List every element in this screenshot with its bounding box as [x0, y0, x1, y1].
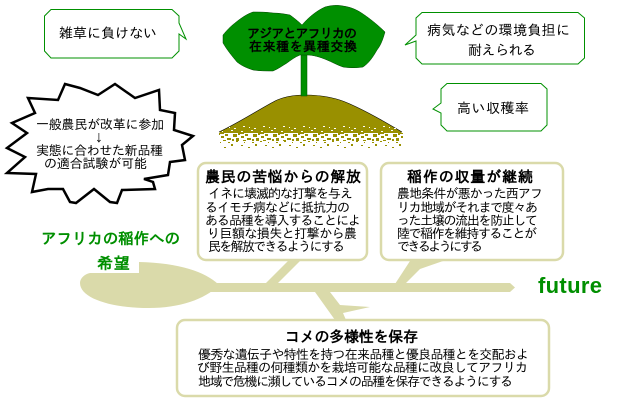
callout: high yield	[433, 84, 547, 131]
heading: hope for African rice farming: アフリカの稲作への	[41, 230, 180, 248]
label: future: future	[538, 273, 602, 298]
panel: preserving rice diversity: 優秀な遺伝子や特性を持つ在来品種と優良品種とを交配およ	[198, 347, 529, 362]
panel: sustained rice yield: できるようにする	[397, 239, 483, 254]
starburst callout: farmer participation: 一般農民が改革に参加	[36, 117, 164, 132]
starburst callout: farmer participation: の適合試験が可能	[44, 156, 147, 171]
panel: sustained rice yield: リカ地域がそれまで度々あ	[397, 200, 538, 215]
panel: preserving rice diversity: 地域で危機に瀕しているコメの品種を保存できるようにする	[198, 374, 513, 389]
panel: preserving rice diversity: コメの多様性を保存	[285, 328, 418, 346]
panel: liberation from farmers' troubles: 農民の苦悩からの解放	[205, 168, 361, 186]
starburst callout: farmer participation: 実態に合わせた新品種	[36, 143, 163, 158]
mound	[219, 95, 403, 148]
callout: disease and stress tolerance: 耐えられる	[468, 42, 536, 58]
leaves	[223, 5, 385, 71]
panel: liberation from farmers' troubles: るイモチ病などに抵抗力の	[205, 200, 350, 215]
heading: hope for African rice farming	[41, 230, 180, 273]
callout: high yield: 高い収穫率	[457, 100, 529, 116]
upper left branch	[265, 261, 300, 284]
spine	[210, 283, 515, 292]
callout: disease and stress tolerance: 病気などの環境負担に	[427, 22, 570, 38]
fish head	[80, 262, 218, 308]
panel: liberation from farmers' troubles: り巨額な損失と打撃から農	[207, 226, 357, 241]
panel: preserving rice diversity: び野生品種の何種類かを栽培可能な品種に改良してアフリカ	[197, 360, 528, 375]
panel: liberation from farmers' troubles: イネに壊滅的な打撃を与え	[208, 186, 353, 201]
lower branch	[315, 292, 370, 320]
panel: liberation from farmers' troubles: ある品種を導入することによ	[205, 213, 361, 228]
panel: sustained rice yield	[381, 163, 563, 260]
panel: sustained rice yield: 稲作の収量が継続	[407, 168, 533, 186]
leaf label	[247, 26, 358, 54]
stem	[301, 54, 307, 96]
panel: sustained rice yield: 農地条件が悪かった西アフ	[397, 186, 543, 201]
callout: disease and stress tolerance	[405, 12, 584, 64]
callout: weed resistance	[44, 10, 186, 58]
panel: liberation from farmers' troubles: 民を解放できるようにする	[208, 239, 345, 254]
starburst callout: farmer participation	[7, 84, 193, 203]
seedling illustration	[219, 5, 403, 148]
panel: sustained rice yield: った土壌の流出を防止して	[397, 213, 538, 228]
callout: weed resistance: 雑草に負けない	[59, 25, 157, 41]
fishbone diagram	[80, 261, 515, 320]
leaf label: アジアとアフリカの	[247, 26, 357, 41]
panel: preserving rice diversity	[177, 320, 549, 396]
panel: liberation from farmers' troubles	[198, 163, 367, 260]
heading: hope for African rice farming: 希望	[97, 255, 130, 273]
panel: sustained rice yield: 陸で稲作を維持することが	[397, 226, 537, 241]
upper right branch	[395, 261, 443, 284]
leaf label: 在来種を異種交換	[249, 39, 358, 54]
starburst callout: farmer participation: ↓	[95, 129, 103, 146]
